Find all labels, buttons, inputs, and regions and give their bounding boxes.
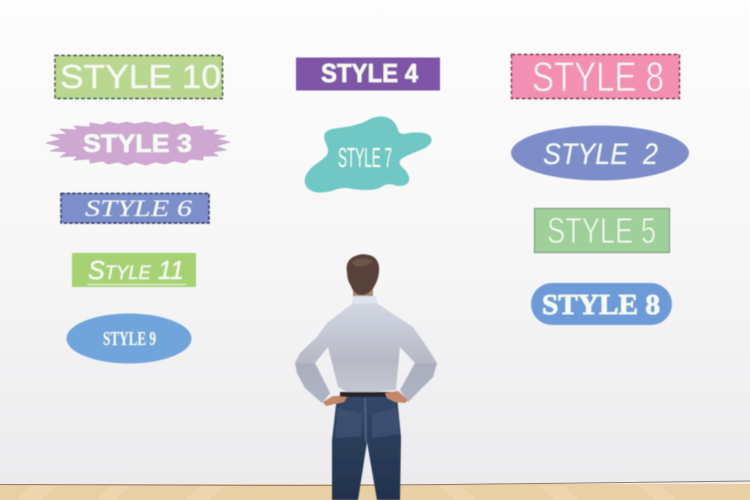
- badge: STYLE 4: [296, 58, 440, 90]
- badge: STYLE 3: STYLE 3: [83, 130, 192, 158]
- badge: STYLE 7: STYLE 7: [338, 142, 392, 173]
- hair: [347, 254, 379, 295]
- belt: [340, 392, 396, 397]
- badge: STYLE 11: [72, 253, 196, 287]
- badge: STYLE 4: STYLE 4: [321, 58, 418, 88]
- person viewed from behind: [295, 254, 437, 500]
- badge: STYLE 10: STYLE 10: [60, 58, 221, 95]
- badge: STYLE 8 blue: [531, 283, 672, 325]
- badge: STYLE 9: [66, 314, 192, 364]
- collar: [352, 296, 377, 304]
- badge: STYLE 2: STYLE 2: [543, 138, 658, 171]
- neck: [353, 284, 373, 298]
- jeans pocket shading: [335, 408, 400, 438]
- jeans centre seam: [365, 398, 366, 442]
- badge: STYLE 9: STYLE 9: [103, 328, 156, 350]
- shirt: [295, 296, 437, 403]
- badge: STYLE 7: [305, 116, 432, 193]
- sleeve shading: [295, 363, 437, 403]
- hair highlight: [352, 258, 373, 266]
- badge: STYLE 8 blue: STYLE 8: [542, 289, 660, 321]
- badge: STYLE 2: [511, 126, 689, 180]
- badge: STYLE 8 pink: STYLE 8: [532, 53, 664, 100]
- badge: STYLE 5: STYLE 5: [547, 210, 656, 251]
- wooden floor: [0, 481, 750, 500]
- badge: STYLE 6: [61, 194, 209, 223]
- badge: STYLE 3: [46, 122, 230, 165]
- left hand: [323, 396, 347, 406]
- badge: STYLE 6: STYLE 6: [85, 196, 193, 221]
- badge: STYLE 11: STYLE 11: [88, 255, 184, 285]
- right hand: [385, 391, 408, 403]
- jeans: [332, 396, 401, 500]
